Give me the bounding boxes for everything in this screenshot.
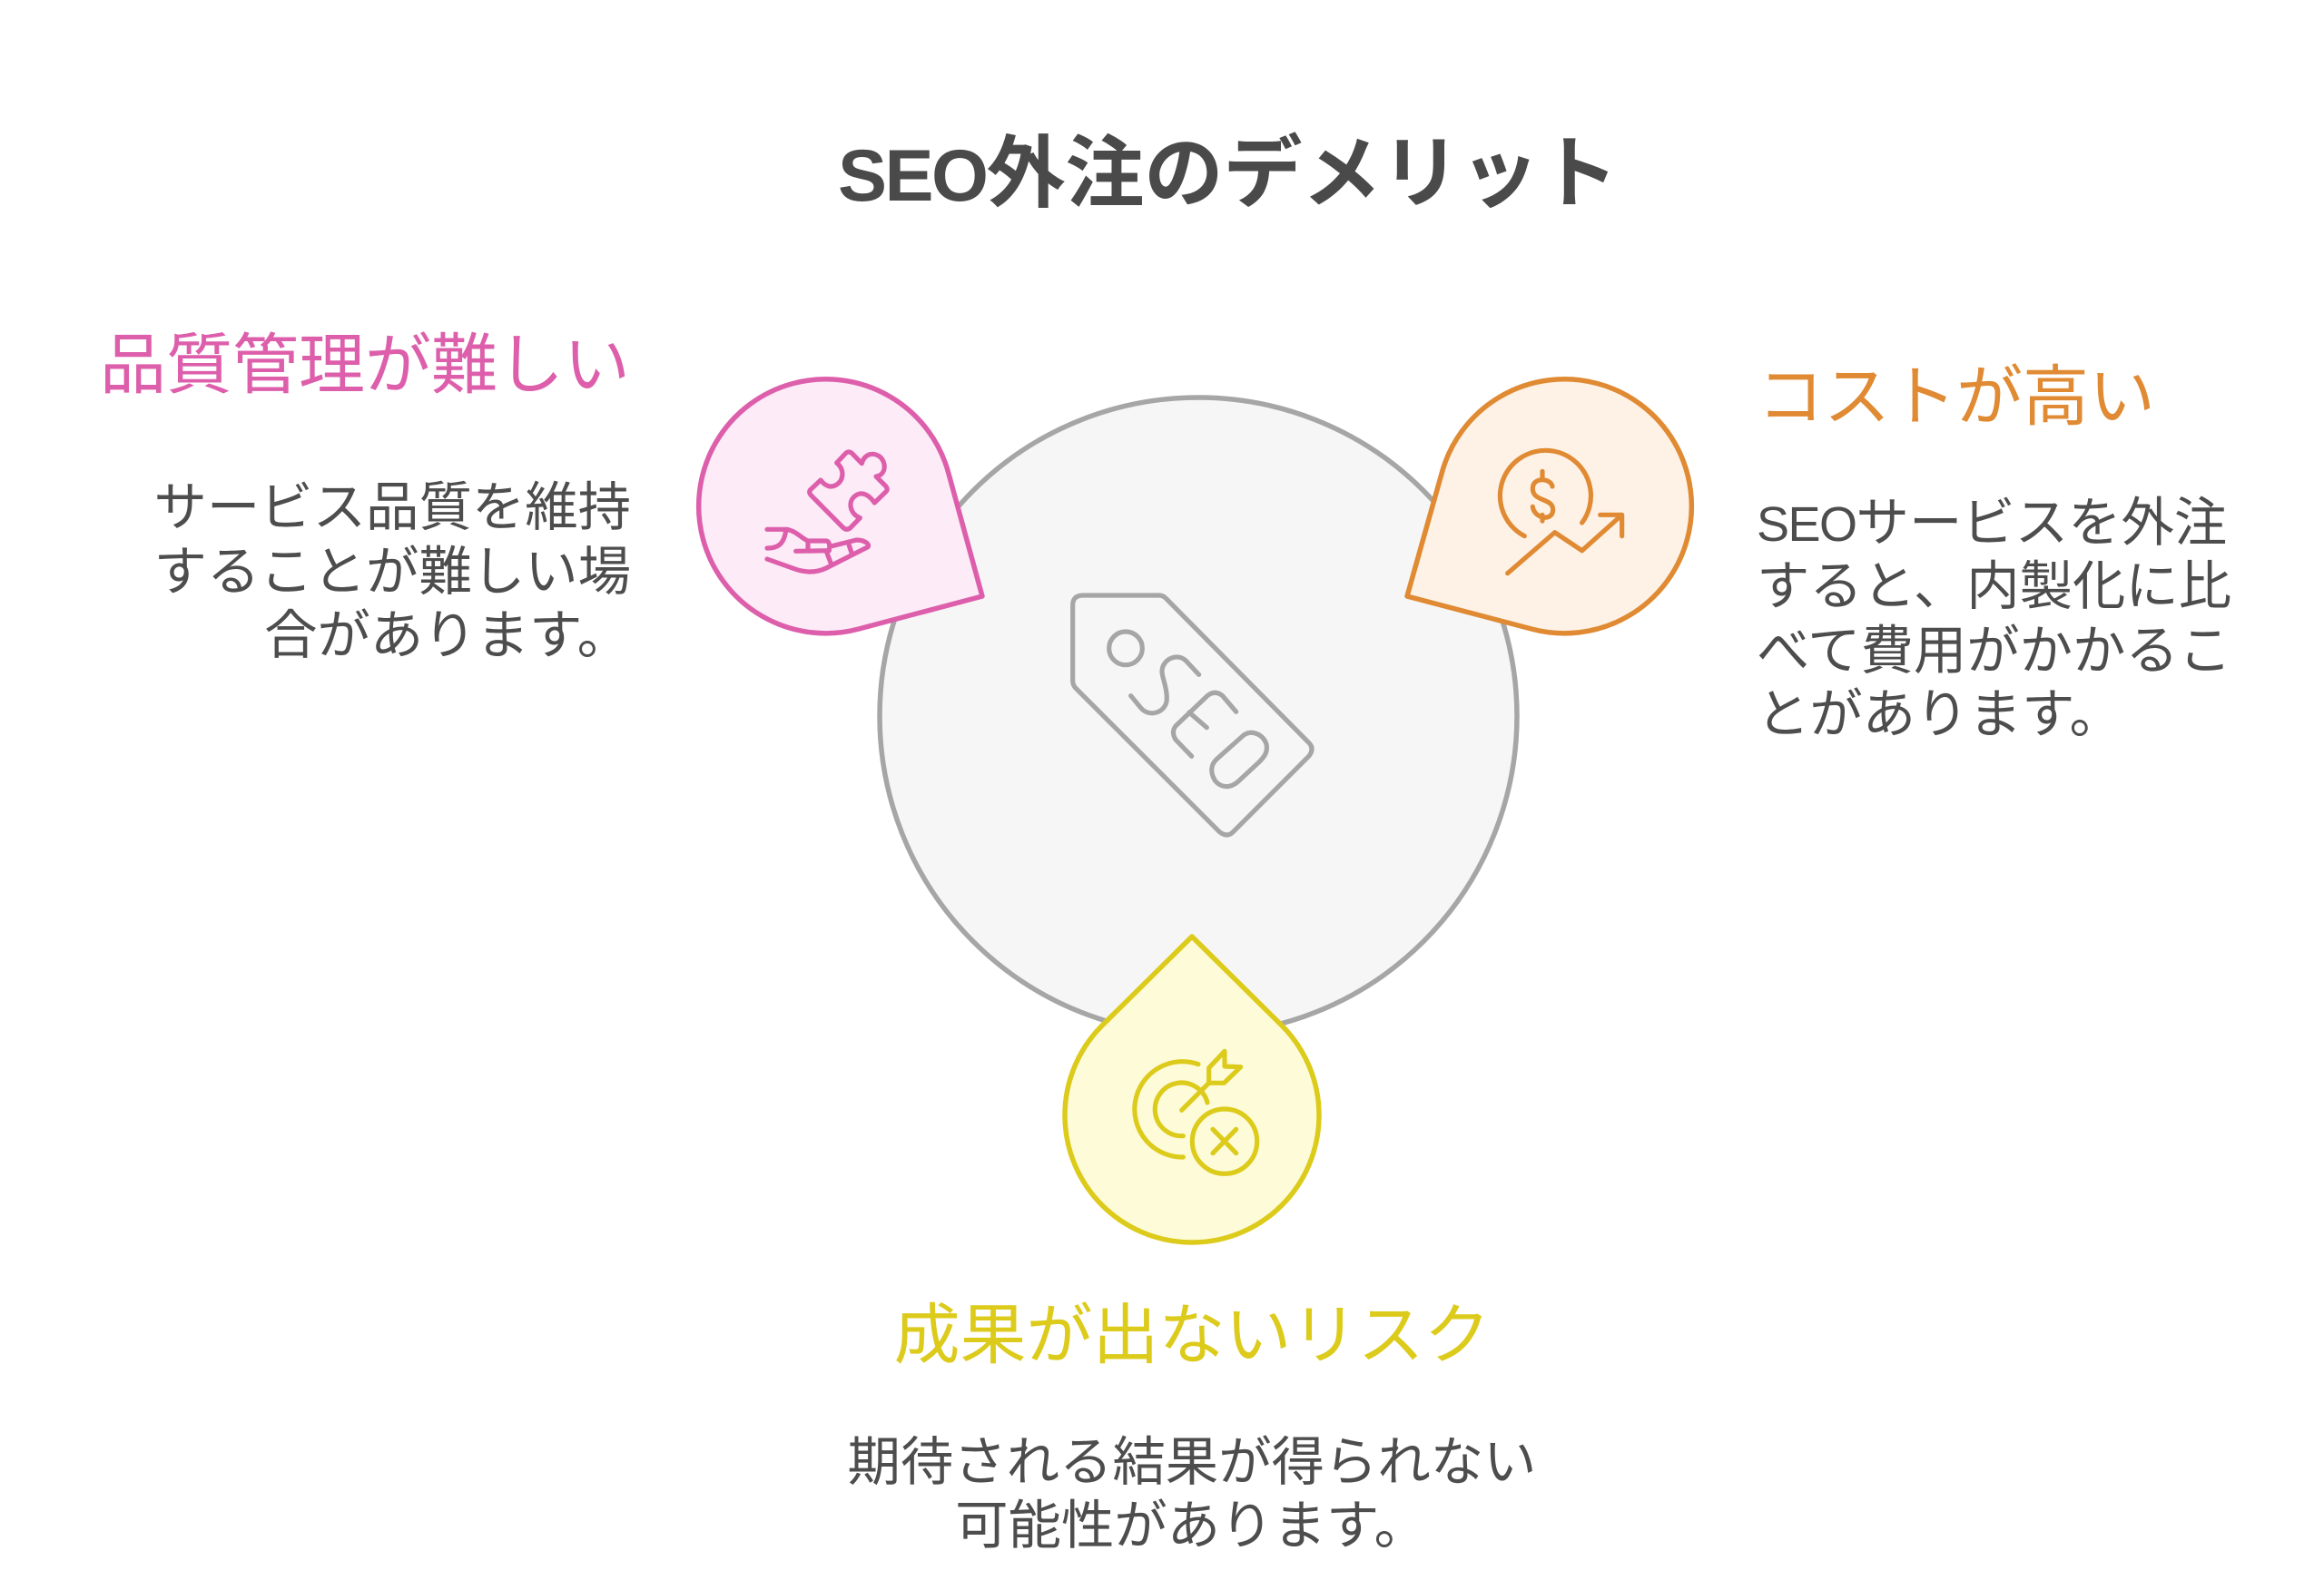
icon: hand with puzzle piece <box>767 452 887 572</box>
text: quality control description: することが難しい場 <box>153 543 631 602</box>
text: high cost description: べて費用がかかるこ <box>1757 622 2231 681</box>
text: quality control description: サービス品質を維持 <box>153 478 631 537</box>
icon: dollar coin with rising chart <box>1500 450 1622 574</box>
text: risk description: 期待される結果が得られない <box>847 1433 1537 1492</box>
title: SEO外注のデメリット <box>838 130 1619 218</box>
text: high cost description: SEOサービスを外注 <box>1757 494 2227 553</box>
panel: high cost <box>1407 360 2231 744</box>
text: quality control description <box>153 478 631 665</box>
panel: quality control difficulty <box>100 329 982 665</box>
text: high cost description: とがあります。 <box>1757 685 2122 744</box>
heading: risk: 成果が出ないリスク <box>893 1299 1491 1372</box>
heading: quality control: 品質管理が難しい <box>100 329 630 402</box>
yellow droplet <box>1065 937 1319 1242</box>
heading: high cost: コストが高い <box>1758 360 2155 434</box>
panel: risk of no results <box>847 937 1537 1556</box>
icon: target with arrow and cross <box>1135 1051 1257 1173</box>
icon: SEO tag <box>1073 595 1312 835</box>
text: quality control description: 合があります。 <box>264 606 630 665</box>
panel: central circle with SEO tag <box>880 398 1517 1035</box>
orange droplet <box>1407 379 1691 633</box>
text: high cost description: すると、内製化に比 <box>1757 557 2231 616</box>
text: high cost description <box>1757 494 2231 744</box>
pink droplet <box>699 379 982 633</box>
text: risk description <box>847 1433 1537 1556</box>
text: risk description: 可能性があります。 <box>955 1497 1427 1556</box>
central circle <box>880 398 1517 1035</box>
